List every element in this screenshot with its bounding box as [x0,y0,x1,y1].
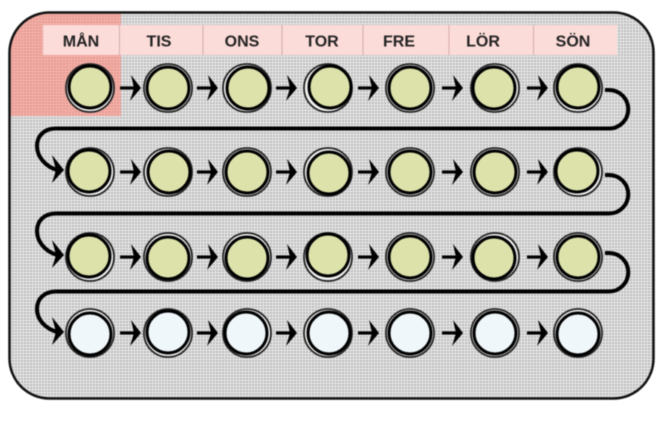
red highlight for Monday [9,12,121,116]
weekday header: LÖR [466,32,500,50]
arrows: row 2 [120,159,548,185]
pills: row 4 [66,309,602,357]
connector: row 1 to row 2 [37,90,628,183]
connector: row 3 to row 4 [37,253,628,345]
weekday header: TIS [147,34,172,50]
pills: row 2 [66,148,602,196]
arrows: row 3 [120,244,548,270]
pills: row 1 [66,64,602,112]
arrows: row 4 [120,320,548,346]
weekday header: ONS [225,34,260,50]
weekday header [43,25,617,55]
weekday header: MÅN [63,32,99,50]
weekday header: FRE [383,34,415,50]
arrows: row 1 [120,75,548,101]
weekday header: TOR [305,34,339,50]
weekday header: SÖN [556,32,590,50]
pills: row 3 [66,233,602,281]
connector: row 2 to row 3 [37,175,628,268]
